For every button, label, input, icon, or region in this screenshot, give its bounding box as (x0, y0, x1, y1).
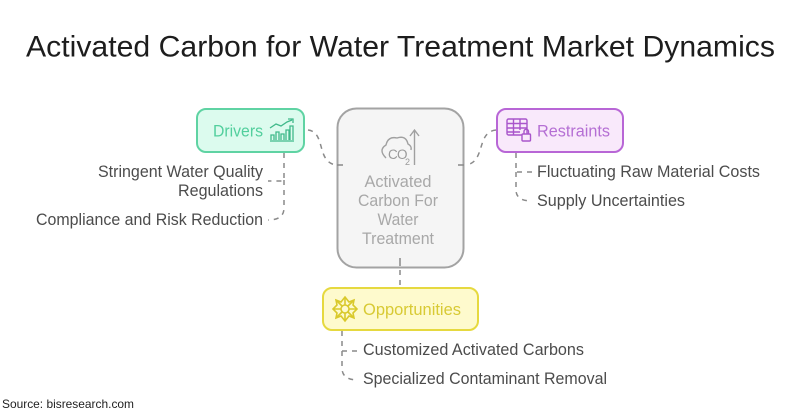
restraints list (537, 163, 760, 210)
central label: Treatment (362, 230, 434, 248)
restraints list: Supply Uncertainties (537, 192, 685, 210)
opportunities list: Customized Activated Carbons (363, 341, 584, 359)
drivers list: Regulations (178, 182, 263, 200)
central label: Activated (364, 173, 432, 191)
icon: CO2 cloud with arrow: C (388, 147, 398, 162)
opportunities list (363, 341, 607, 388)
drivers list (36, 163, 264, 229)
restraints list: Fluctuating Raw Material Costs (537, 163, 760, 181)
connector stubs on central box (337, 165, 464, 266)
panel: restraints (497, 109, 623, 152)
restraints heading: Restraints (537, 122, 610, 140)
title: Activated Carbon for Water Treatment Market Dynamics (26, 30, 775, 64)
drivers heading: Drivers (213, 122, 263, 140)
panel: central topic (337, 108, 464, 268)
icon: CO2 cloud with arrow (382, 130, 419, 167)
icon: CO2 cloud with arrow: 2 (405, 157, 410, 167)
central label: Water (378, 211, 419, 229)
connectors (268, 130, 532, 380)
icon: table with lock (507, 119, 530, 141)
opportunities heading: Opportunities (363, 300, 461, 319)
panel: drivers (197, 109, 304, 152)
central label: Carbon For (358, 192, 438, 210)
panel: opportunities (323, 288, 478, 330)
drivers list: Stringent Water Quality (98, 163, 264, 181)
source note: Source: bisresearch.com (2, 397, 134, 411)
icon: CO2 cloud with arrow: O (397, 147, 408, 162)
icon: growth chart (270, 119, 294, 141)
icon: flower emblem (333, 297, 357, 321)
central label (358, 173, 438, 248)
opportunities list: Specialized Contaminant Removal (363, 370, 607, 388)
drivers list: Compliance and Risk Reduction (36, 211, 263, 229)
